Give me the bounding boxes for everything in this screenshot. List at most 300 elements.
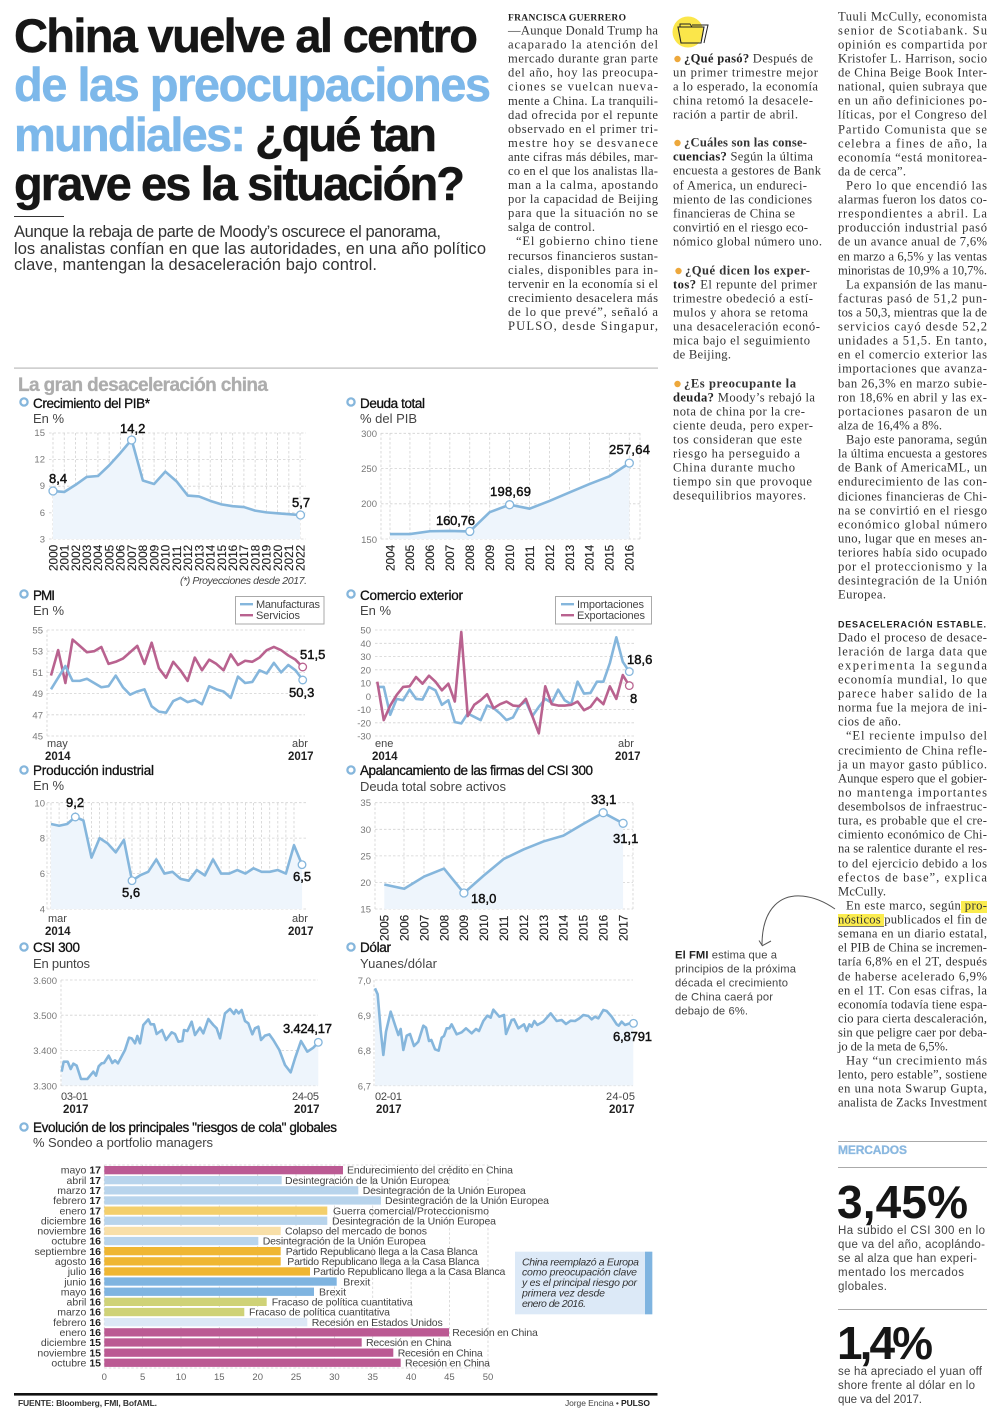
article column 3: Europea.: [838, 588, 886, 602]
chart: comercio exterior: abr: [618, 738, 634, 750]
chart: crecimiento del PIB: 2020: [271, 544, 285, 571]
chart: deuda total: 2016: [623, 544, 637, 571]
chart: apalancamiento: 30: [360, 825, 371, 836]
chart: apalancamiento: 15: [360, 904, 371, 916]
x axis: 25: [291, 1372, 301, 1383]
chart: apalancamiento: 2005: [378, 914, 392, 941]
bar labels: Colapso del mercado de bonos: [285, 1226, 427, 1238]
month labels: diciembre 16: [41, 1215, 101, 1227]
article column 3: ban 26,3% en marzo subie-: [838, 376, 987, 390]
chart: riesgos de cola: Evolución de los principales "riesgos de cola" globales: [33, 1120, 337, 1135]
bar labels: Recesión en China: [366, 1337, 452, 1349]
chart: CSI 300: 03-01: [61, 1091, 88, 1103]
x axis: 15: [214, 1372, 225, 1383]
article column 3: [837, 10, 988, 1110]
chart: crecimiento del PIB: 2011: [170, 546, 184, 571]
x axis: 5: [140, 1372, 145, 1383]
article column 3: económico global número: [838, 518, 987, 532]
article column 1: dad ofrecida por el repunte: [508, 108, 658, 122]
legend: PMI: Servicios: [256, 610, 300, 622]
article column 3: DESACELERACIÓN ESTABLE.: [838, 618, 986, 630]
arrow: [759, 896, 835, 946]
chart: comercio exterior: 40: [360, 639, 371, 650]
bar labels: Endurecimiento del crédito en China: [347, 1165, 513, 1177]
chart: apalancamiento: 31,1: [613, 831, 638, 846]
month labels: febrero 17: [53, 1195, 101, 1207]
article column 3: en el comercio exterior las: [838, 348, 987, 362]
bar labels: Partido Republicano llega a la Casa Blanca: [287, 1256, 479, 1268]
article column 3: el PIB de China se incremen-: [838, 940, 987, 954]
chart: crecimiento del PIB: 2009: [147, 545, 161, 571]
chart: deuda total: 2008: [463, 544, 477, 571]
chart: apalancamiento: 2014: [557, 914, 571, 941]
chart: producción industrial: 6: [40, 869, 45, 880]
chart: comercio exterior: ene: [375, 738, 393, 750]
chart: crecimiento del PIB: 9: [40, 481, 45, 492]
article column 2: questions: una desaceleración econó-: [673, 320, 820, 334]
chart: comercio exterior: [347, 588, 652, 763]
article column 2: questions: un primer trimestre mejor: [673, 66, 819, 80]
month labels: mayo 16: [61, 1286, 101, 1298]
chart: crecimiento del PIB: Crecimiento del PIB*: [33, 396, 151, 411]
title: mundiales:: [14, 108, 246, 161]
subtitle deck: [14, 223, 486, 274]
chart: PMI: En %: [33, 603, 65, 618]
callout: China reemplazó a Europa: como preocupación clave: [522, 1266, 637, 1278]
article column 3: La expansión de las manu-: [846, 278, 987, 292]
article column 2: questions: deuda? Moody’s rebajó la: [673, 390, 815, 404]
chart: deuda total: 2009: [483, 545, 497, 571]
article column 2: questions: riesgo ha perseguido a: [673, 446, 800, 460]
article column 3: Partido Comunista que se: [838, 122, 987, 136]
callout: China reemplazó a Europa: y es el principal riesgo por: [521, 1277, 638, 1289]
chart: dólar: 6,9: [358, 1011, 371, 1022]
callout: IMF: debajo de 6%.: [675, 1006, 748, 1018]
chart: comercio exterior: 8: [630, 691, 637, 706]
article column 2: questions: financieras de China se: [673, 206, 795, 220]
callout: China reemplazó a Europa: China reemplazó a Europa: [522, 1256, 639, 1268]
article column 2: questions: de Beijing.: [673, 348, 731, 362]
chart: deuda total: 2013: [563, 544, 577, 571]
chart: crecimiento del PIB: 2016: [226, 544, 240, 571]
article column 3: cimiento económico de Chi-: [838, 828, 987, 842]
panel: mercados: [837, 1141, 987, 1406]
chart: PMI: abr: [292, 738, 308, 750]
chart: crecimiento del PIB: 2003: [80, 544, 94, 571]
chart: comercio exterior: 0: [366, 692, 371, 703]
callout: China reemplazó a Europa: [515, 1252, 652, 1314]
chart: apalancamiento: [347, 763, 638, 941]
chart: CSI 300: 2017: [294, 1104, 320, 1116]
article column 3: ja un mayor gasto público.: [837, 758, 987, 772]
article column 3: de Bank of AmericaML, un: [838, 460, 988, 474]
chart: CSI 300: 3.400: [33, 1046, 57, 1057]
article column 3: jo de la meta de 6,5%.: [837, 1040, 948, 1054]
article column 3: leración de larga data que: [838, 644, 987, 658]
article column 1: mestre hoy se desvanece: [508, 136, 658, 150]
bar labels: Desintegración de la Unión Europea: [332, 1215, 496, 1227]
bar labels: Recesión en China: [398, 1347, 483, 1359]
month labels: noviembre 15: [37, 1347, 101, 1359]
chart: PMI: PMI: [33, 588, 55, 603]
chart: deuda total: % del PIB: [360, 411, 417, 426]
chart: producción industrial: 5,6: [122, 885, 140, 900]
chart: crecimiento del PIB: 2002: [69, 545, 83, 571]
article column 3: opinión es compartida por: [838, 38, 988, 52]
chart: deuda total: 2012: [543, 545, 557, 571]
article column 3: cio para cierta descaleración,: [838, 1012, 987, 1026]
article column 3: unidades a 51,5. En tanto,: [838, 334, 987, 348]
x axis: 45: [444, 1372, 455, 1383]
month labels: abril 16: [67, 1296, 101, 1308]
chart: comercio exterior: 30: [360, 652, 371, 663]
chart: crecimiento del PIB: 2015: [215, 544, 229, 571]
bar labels: Brexit: [343, 1276, 370, 1288]
chart: deuda total: 2015: [603, 544, 617, 571]
article column 1: acaparado la atención del: [508, 38, 658, 52]
callout: IMF: El FMI estima que a: [675, 950, 778, 962]
chart: comercio exterior: -20: [357, 718, 371, 729]
article column 3: sin que peligre caer por deba-: [838, 1026, 987, 1040]
article column 2: questions: of America, un endureci-: [673, 178, 807, 192]
article column 2: questions: tos consideran que este: [673, 432, 802, 446]
article column 3: na se ralentice durante el res-: [838, 842, 987, 856]
article column 3: de haberse acelerado 6,9%: [838, 970, 988, 984]
chart: deuda total: 150: [361, 535, 377, 546]
month labels: enero 17: [60, 1205, 101, 1217]
article column 2: questions: miento de las condiciones: [673, 192, 812, 206]
article column 2: questions: ¿Cuáles son las conse-: [684, 136, 807, 150]
legend: comercio: Importaciones: [577, 599, 644, 611]
article column 1: —Aunque Donald Trump ha: [507, 24, 658, 38]
panel: mercados: que va del 2017.: [838, 1394, 922, 1406]
chart: dólar: 02-01: [375, 1091, 402, 1103]
article column 3: minoristas de 10,9% a 10,7%.: [838, 264, 987, 278]
article column 1: ciales, disponibles para in-: [508, 263, 658, 277]
article column 1: PULSO, desde Singapur,: [508, 319, 658, 333]
chart: crecimiento del PIB: [20, 396, 310, 587]
chart: deuda total: 2011: [523, 546, 537, 571]
chart: comercio exterior: En %: [360, 603, 392, 618]
chart: CSI 300: En puntos: [33, 956, 90, 971]
article column 2: questions: a lo esperado, la economía: [673, 80, 818, 94]
article column 3: economía “está monitorea-: [838, 150, 987, 164]
chart: crecimiento del PIB: 2001: [58, 545, 72, 571]
article column 1: mente a China. La tranquili-: [508, 94, 658, 108]
month labels: marzo 16: [57, 1307, 101, 1319]
article column 2: questions: tiempo sin que provoque: [673, 474, 812, 488]
article column 1: [507, 14, 659, 333]
chart: crecimiento del PIB: 6: [40, 508, 45, 519]
chart: crecimiento del PIB: 2005: [102, 544, 116, 571]
chart: producción industrial: 10: [34, 798, 45, 810]
article column 2: questions: china retomó la desacele-: [673, 94, 813, 108]
chart: dólar: 7,0: [358, 976, 371, 987]
bar labels: Recesión en Estados Unidos: [312, 1317, 443, 1329]
chart: producción industrial: 2014: [45, 926, 71, 938]
chart: producción industrial: abr: [292, 913, 308, 925]
chart: CSI 300: 24-05: [292, 1091, 319, 1103]
legend: PMI: [236, 596, 324, 624]
article column 3: analista de Zacks Investment: [838, 1096, 988, 1110]
x axis: 35: [367, 1372, 378, 1383]
chart: comercio exterior: 2014: [372, 751, 398, 763]
article column 3: economía mundial, lo que: [838, 672, 987, 686]
chart: apalancamiento: 2015: [577, 914, 591, 941]
article column 3: desintegración de la Unión: [838, 574, 988, 588]
chart: producción industrial: 6,5: [293, 869, 311, 884]
chart: dólar: 6,7: [358, 1082, 371, 1092]
chart: deuda total: 250: [361, 464, 377, 475]
article column 3: celebra a fines de año, la: [838, 136, 987, 150]
month labels: marzo 17: [57, 1185, 101, 1197]
chart: CSI 300: 3.300: [33, 1082, 57, 1092]
article column 2: questions: nota de china por la cre-: [673, 404, 805, 418]
bar labels: Desintegración de la Unión Europea: [285, 1175, 449, 1187]
chart: deuda total: 2007: [443, 545, 457, 571]
month labels: mayo 17: [61, 1165, 101, 1177]
article column 1: tervenir en la economía si el: [508, 277, 658, 291]
chart: CSI 300: 3.500: [33, 1011, 57, 1022]
article column 3: en una nota Swarup Gupta,: [838, 1082, 987, 1096]
article column 3: taría 6,8% en el 2T, después: [838, 954, 987, 968]
article column 3: teriores había sido ocupado: [838, 546, 987, 560]
article column 3: economía todavía tiene espa-: [838, 998, 987, 1012]
month labels: abril 17: [67, 1175, 101, 1187]
article column 3: en el 1T. Con esas cifras, la: [838, 984, 987, 998]
panel: mercados: globales.: [838, 1281, 887, 1293]
chart: crecimiento del PIB: 2021: [282, 545, 296, 571]
article column 3: desembolsos de infraestruc-: [838, 800, 987, 814]
panel: mercados: 1,4%: [837, 1317, 933, 1369]
title: grave es la situación?: [14, 157, 465, 210]
chart: dólar: [347, 940, 652, 1116]
chart: dólar: 24-05: [606, 1091, 635, 1103]
article column 2: questions: mica bajo el seguimiento: [673, 334, 810, 348]
bar labels: Desintegración de la Unión Europea: [263, 1236, 426, 1248]
month labels: octubre 16: [51, 1236, 101, 1248]
chart: crecimiento del PIB: 2004: [91, 544, 105, 571]
article column 3: da de cerca”.: [838, 164, 906, 178]
title: [14, 9, 491, 210]
article column 2: questions: ¿Qué pasó? Después de: [684, 52, 813, 66]
article column 3: cios de año.: [838, 714, 901, 728]
chart: apalancamiento: 2011: [497, 916, 511, 941]
article column 3: crecimiento de China refle-: [838, 744, 987, 758]
bar labels: Fracaso de política cuantitativa: [272, 1296, 413, 1308]
chart: crecimiento del PIB: 2000: [46, 544, 60, 571]
legend: comercio: Exportaciones: [577, 610, 646, 622]
chart: apalancamiento: Apalancamiento de las firmas del CSI 300: [360, 763, 593, 778]
chart: crecimiento del PIB: (*) Proyecciones desde 2017.: [180, 575, 307, 587]
chart: deuda total: Deuda total: [360, 396, 425, 411]
article column 3: semana en un diario estatal,: [838, 926, 987, 940]
x axis: 30: [329, 1372, 340, 1383]
chart: producción industrial: Producción industrial: [33, 763, 154, 778]
chart: dólar: 2017: [376, 1104, 402, 1116]
chart: comercio exterior: 50: [360, 626, 371, 636]
chart: producción industrial: 8: [40, 834, 45, 844]
article column 3: rrespondientes a abril. La: [838, 206, 987, 220]
bar labels: Partido Republicano llega a la Casa Blanca: [313, 1266, 505, 1278]
article column 3: la última encuesta a gestores: [838, 446, 987, 460]
chart: deuda total: [347, 396, 650, 571]
chart: comercio exterior: Comercio exterior: [360, 588, 464, 603]
article column 1: man a la calma, apostando: [508, 178, 658, 192]
x axis: 40: [406, 1372, 416, 1383]
article column 3: diciones financieras de Chi-: [838, 490, 987, 504]
article column 3: endurecimiento de las con-: [838, 474, 987, 488]
article column 2: questions: ¿Es preocupante la: [684, 376, 797, 390]
month labels: diciembre 15: [41, 1337, 101, 1349]
chart: crecimiento del PIB: 2013: [192, 544, 206, 571]
chart: crecimiento del PIB: 3: [40, 534, 45, 546]
bar labels: Recesión en China: [452, 1327, 538, 1339]
article column 1: ciones se vuelcan nueva-: [508, 80, 658, 94]
chart: crecimiento del PIB: 2006: [114, 544, 128, 571]
subtitle deck: Aunque la rebaja de parte de Moody’s oscurece el panorama,: [14, 223, 441, 241]
month labels: noviembre 16: [37, 1226, 101, 1238]
article column 3: de China Beige Book Inter-: [838, 66, 987, 80]
article column 1: de lo que prevé”, señaló a: [508, 305, 658, 319]
chart: crecimiento del PIB: 2010: [159, 544, 173, 571]
chart: riesgos de cola: % Sondeo a portfolio managers: [33, 1135, 214, 1150]
chart: dólar: 2017: [609, 1104, 635, 1116]
month labels: septiembre 16: [34, 1246, 101, 1258]
chart: crecimiento del PIB: 14,2: [120, 421, 145, 436]
chart: PMI: 2014: [45, 751, 71, 763]
chart: deuda total: 160,76: [436, 513, 475, 528]
chart: crecimiento del PIB: 2012: [181, 545, 195, 571]
callout: IMF: [675, 950, 797, 1018]
chart: deuda total: 198,69: [490, 484, 531, 499]
article column 3: norma fue la mejora de ini-: [838, 700, 987, 714]
article column 3: producción industrial pasó: [838, 220, 987, 234]
callout: China reemplazó a Europa: enero de 2016.: [522, 1298, 586, 1310]
panel: mercados: MERCADOS: [838, 1143, 907, 1157]
month labels: julio 16: [67, 1266, 101, 1278]
chart: producción industrial: 2017: [288, 926, 314, 938]
panel: mercados: 3,45%: [837, 1176, 968, 1228]
article column 3: McCully.: [838, 884, 886, 898]
article column 3: Tuuli McCully, economista: [838, 10, 987, 24]
panel: mercados: que va del año, acoplándo-: [838, 1239, 985, 1251]
x axis: 20: [252, 1372, 263, 1383]
chart: comercio exterior: -10: [357, 705, 371, 716]
chart: apalancamiento: 18,0: [471, 891, 496, 906]
chart: PMI: 53: [32, 647, 43, 658]
chart: deuda total: 257,64: [609, 442, 650, 457]
article column 2: questions: trimestre obedeció a estí-: [673, 292, 813, 306]
article column 3: alarmas fueron los datos co-: [838, 192, 987, 206]
chart: deuda total: 2005: [403, 544, 417, 571]
panel: mercados: se ha apreciado el yuan off: [838, 1366, 983, 1378]
chart: deuda total: 200: [361, 499, 377, 510]
article column 3: portaciones pasaron de un: [838, 404, 988, 418]
title: China vuelve al centro: [14, 9, 478, 62]
section heading: La gran desaceleración china: [18, 375, 268, 396]
chart: apalancamiento: 2009: [457, 915, 471, 941]
article column 1: FRANCISCA GUERRERO: [508, 14, 626, 24]
article column 3: no mantenga importantes: [838, 786, 987, 800]
article column 3: de un avance anual de 7,6%: [838, 234, 988, 248]
article column 2: questions: tos? El repunte del primer: [673, 278, 818, 292]
chart: PMI: 55: [32, 626, 43, 636]
article column 1: mercado durante gran parte: [508, 52, 658, 66]
panel: mercados: Ha subido el CSI 300 en lo: [838, 1225, 985, 1237]
chart: CSI 300: CSI 300: [33, 940, 80, 955]
article column 3: “El reciente impulso del: [846, 728, 988, 742]
chart: dólar: Yuanes/dólar: [360, 956, 438, 971]
article column 1: por la capacidad de Beijing: [508, 192, 659, 206]
x axis: 0: [102, 1372, 107, 1383]
chart: PMI: 51: [32, 668, 43, 679]
article column 2: questions: ¿Qué dicen los exper-: [685, 264, 810, 278]
article column 3: uno, lugar que en meses an-: [838, 532, 987, 546]
chart: crecimiento del PIB: 15: [34, 428, 45, 439]
chart: apalancamiento: 35: [360, 798, 371, 809]
article column 2: questions: ración a partir de abril.: [673, 108, 798, 122]
chart: comercio exterior: 20: [360, 665, 371, 676]
article column 2: questions: [673, 52, 822, 502]
article column 3: nósticos publicados el fin de: [838, 912, 987, 926]
article column 3: por el proteccionismo y la: [838, 560, 987, 574]
chart: comercio exterior: 18,6: [627, 652, 652, 667]
x axis: 50: [483, 1372, 493, 1383]
chart: deuda total: 300: [361, 429, 377, 440]
article column 3: alza de 16,4% a 8%.: [838, 418, 942, 432]
chart: apalancamiento: 2008: [437, 914, 451, 941]
chart: PMI: 2017: [288, 751, 314, 763]
chart: PMI: [20, 588, 325, 763]
icon: folder: [672, 16, 708, 48]
article column 3: ron 18,6% en abril y las ex-: [838, 390, 987, 404]
article column 1: observado en el primer tri-: [508, 122, 658, 136]
chart: CSI 300: 2017: [63, 1104, 89, 1116]
month labels: junio 16: [63, 1276, 101, 1288]
chart: producción industrial: 9,2: [66, 795, 84, 810]
callout: China reemplazó a Europa: primera vez desde: [521, 1288, 605, 1300]
chart: CSI 300: 3.600: [33, 976, 57, 987]
bar labels: Desintegración de la Unión Europea: [385, 1195, 549, 1207]
article column 3: tura, es probable que el cre-: [838, 814, 987, 828]
chart: apalancamiento: 2016: [596, 914, 610, 941]
chart: deuda total: 2010: [503, 544, 517, 571]
chart: producción industrial: [20, 763, 314, 938]
chart: crecimiento del PIB: 2018: [248, 544, 262, 571]
chart: PMI: 45: [32, 732, 43, 742]
source: FUENTE: Bloomberg, FMI, BofAML.: [18, 1398, 157, 1408]
panel: mercados: se al alza que han experi-: [838, 1253, 977, 1265]
month labels: febrero 16: [53, 1317, 101, 1329]
chart: comercio exterior: -30: [357, 732, 371, 742]
x axis: [102, 1372, 493, 1383]
chart: crecimiento del PIB: 2008: [136, 544, 150, 571]
title: ¿qué tan: [255, 108, 437, 161]
title: de las preocupaciones: [14, 58, 491, 111]
chart: apalancamiento: 2007: [417, 915, 431, 941]
article column 1: salga de control.: [508, 220, 595, 234]
chart: deuda total: 2014: [583, 544, 597, 571]
highlighted word: [838, 901, 987, 927]
bars: [104, 1166, 449, 1367]
chart: apalancamiento: 2010: [477, 914, 491, 941]
article column 2: questions: desequilibrios mayores.: [673, 488, 806, 502]
month labels: octubre 15: [51, 1357, 101, 1369]
chart: crecimiento del PIB: 2014: [204, 544, 218, 571]
chart: PMI: may: [47, 738, 68, 750]
chart: comercio exterior: 10: [360, 678, 371, 690]
